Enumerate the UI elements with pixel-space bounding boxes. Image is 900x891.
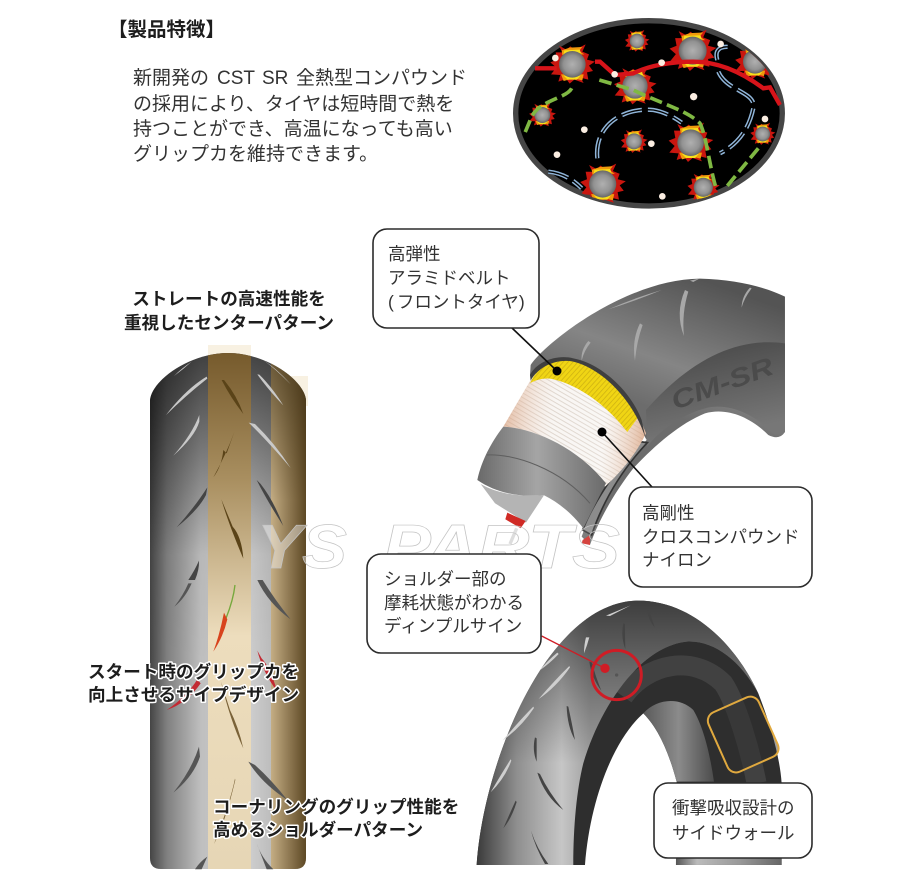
- yellow aramid belt: [530, 359, 639, 432]
- callout: cross compound nylon: クロスコンパウンド: [642, 527, 800, 547]
- tread grooves upper: [166, 360, 291, 580]
- heading: shoulder pattern: コーナリングのグリップ性能を: [213, 797, 459, 817]
- callout: aramid belt: 高弾性: [388, 244, 440, 264]
- text block: compound description: CST: [217, 68, 255, 89]
- watermark: YS: [257, 513, 347, 582]
- diagram: tire tread front view: [150, 345, 308, 870]
- sidewall band: [623, 665, 757, 783]
- heading: shoulder pattern: 高めるショルダーパターン: [213, 820, 423, 840]
- heading: sipe design: 向上させるサイプデザイン: [88, 685, 299, 705]
- callout: cross compound nylon: ナイロン: [642, 550, 712, 570]
- white filler dots: [552, 41, 768, 200]
- callout: cross compound nylon: 高剛性: [642, 503, 694, 523]
- bead strip: [583, 442, 647, 535]
- white cross-ply layer: [503, 374, 646, 487]
- center band highlight: [208, 350, 251, 870]
- text block: compound description: 全熱型コンパウンド: [296, 67, 467, 89]
- watermark: [257, 513, 620, 582]
- blue silica chains: [548, 47, 754, 188]
- sidewall: [646, 342, 785, 447]
- callout: shock absorbing sidewall: [654, 783, 812, 858]
- cut lip: [530, 357, 646, 440]
- heading: center pattern: ストレートの高速性能を: [132, 289, 326, 309]
- text block: compound description: グリップカを維持できます。: [133, 143, 378, 165]
- callout: cross compound nylon: [598, 428, 812, 587]
- text block: compound description: 持つことができ、高温になっても高い: [133, 118, 453, 140]
- heading: sipe design: [88, 662, 299, 705]
- callout: aramid belt: (フロントタイヤ): [388, 292, 525, 312]
- heading: shoulder pattern: [213, 797, 459, 840]
- heading: product features: 【製品特徴】: [108, 19, 225, 41]
- tread grooves: [491, 605, 655, 864]
- text block: compound description: SR: [262, 68, 288, 89]
- text block: compound description: 新開発の: [133, 67, 209, 89]
- callout: shock absorbing sidewall: サイドウォール: [672, 823, 794, 843]
- callout: dimple sign: [367, 554, 541, 653]
- red polymer line: [535, 62, 780, 105]
- inner tube: [481, 484, 544, 523]
- callout: dimple sign: 摩耗状態がわかる: [384, 593, 524, 613]
- tread grooves lower: [167, 580, 291, 869]
- diagram: heated compound oval: [516, 21, 782, 206]
- valve red tip: [505, 513, 526, 528]
- watermark: PARTS: [383, 513, 620, 582]
- text block: compound description: [133, 67, 467, 165]
- sidewall base: [477, 601, 782, 865]
- callout: aramid belt: アラミドベルト: [388, 268, 510, 288]
- callout: dimple sign: ディンプルサイン: [384, 616, 522, 636]
- tread grooves: [582, 279, 752, 361]
- diagram: cutaway tire: [477, 279, 785, 545]
- tread: [477, 601, 758, 865]
- tire body: [530, 279, 785, 545]
- heated particles: [529, 30, 775, 204]
- text block: compound description: の採用により、タイヤは短時間で熱を: [133, 93, 454, 115]
- hub interior: [643, 701, 714, 782]
- dimple: [615, 673, 618, 677]
- shoulder band highlight: [271, 350, 306, 870]
- green dashed polymer line: [524, 80, 758, 190]
- callout: shock absorbing sidewall: 衝撃吸収設計の: [672, 798, 794, 818]
- heading: center pattern: 重視したセンターパターン: [124, 313, 334, 333]
- carcass inner: [477, 427, 606, 528]
- sidewall lettering: CM-SR: [667, 351, 778, 416]
- heading: sipe design: スタート時のグリップカを: [88, 662, 299, 682]
- red dimple marker: [542, 636, 641, 700]
- diagram: full tire three-quarter view: [477, 601, 782, 865]
- callout: aramid belt: [373, 229, 562, 376]
- gold sidewall highlight: [705, 694, 782, 775]
- red shoulder grooves: [167, 651, 277, 710]
- heading: center pattern: [124, 289, 334, 333]
- callout: dimple sign: ショルダー部の: [384, 569, 506, 589]
- bottom rim strip: [676, 858, 782, 865]
- green and red marked groove: [213, 585, 235, 652]
